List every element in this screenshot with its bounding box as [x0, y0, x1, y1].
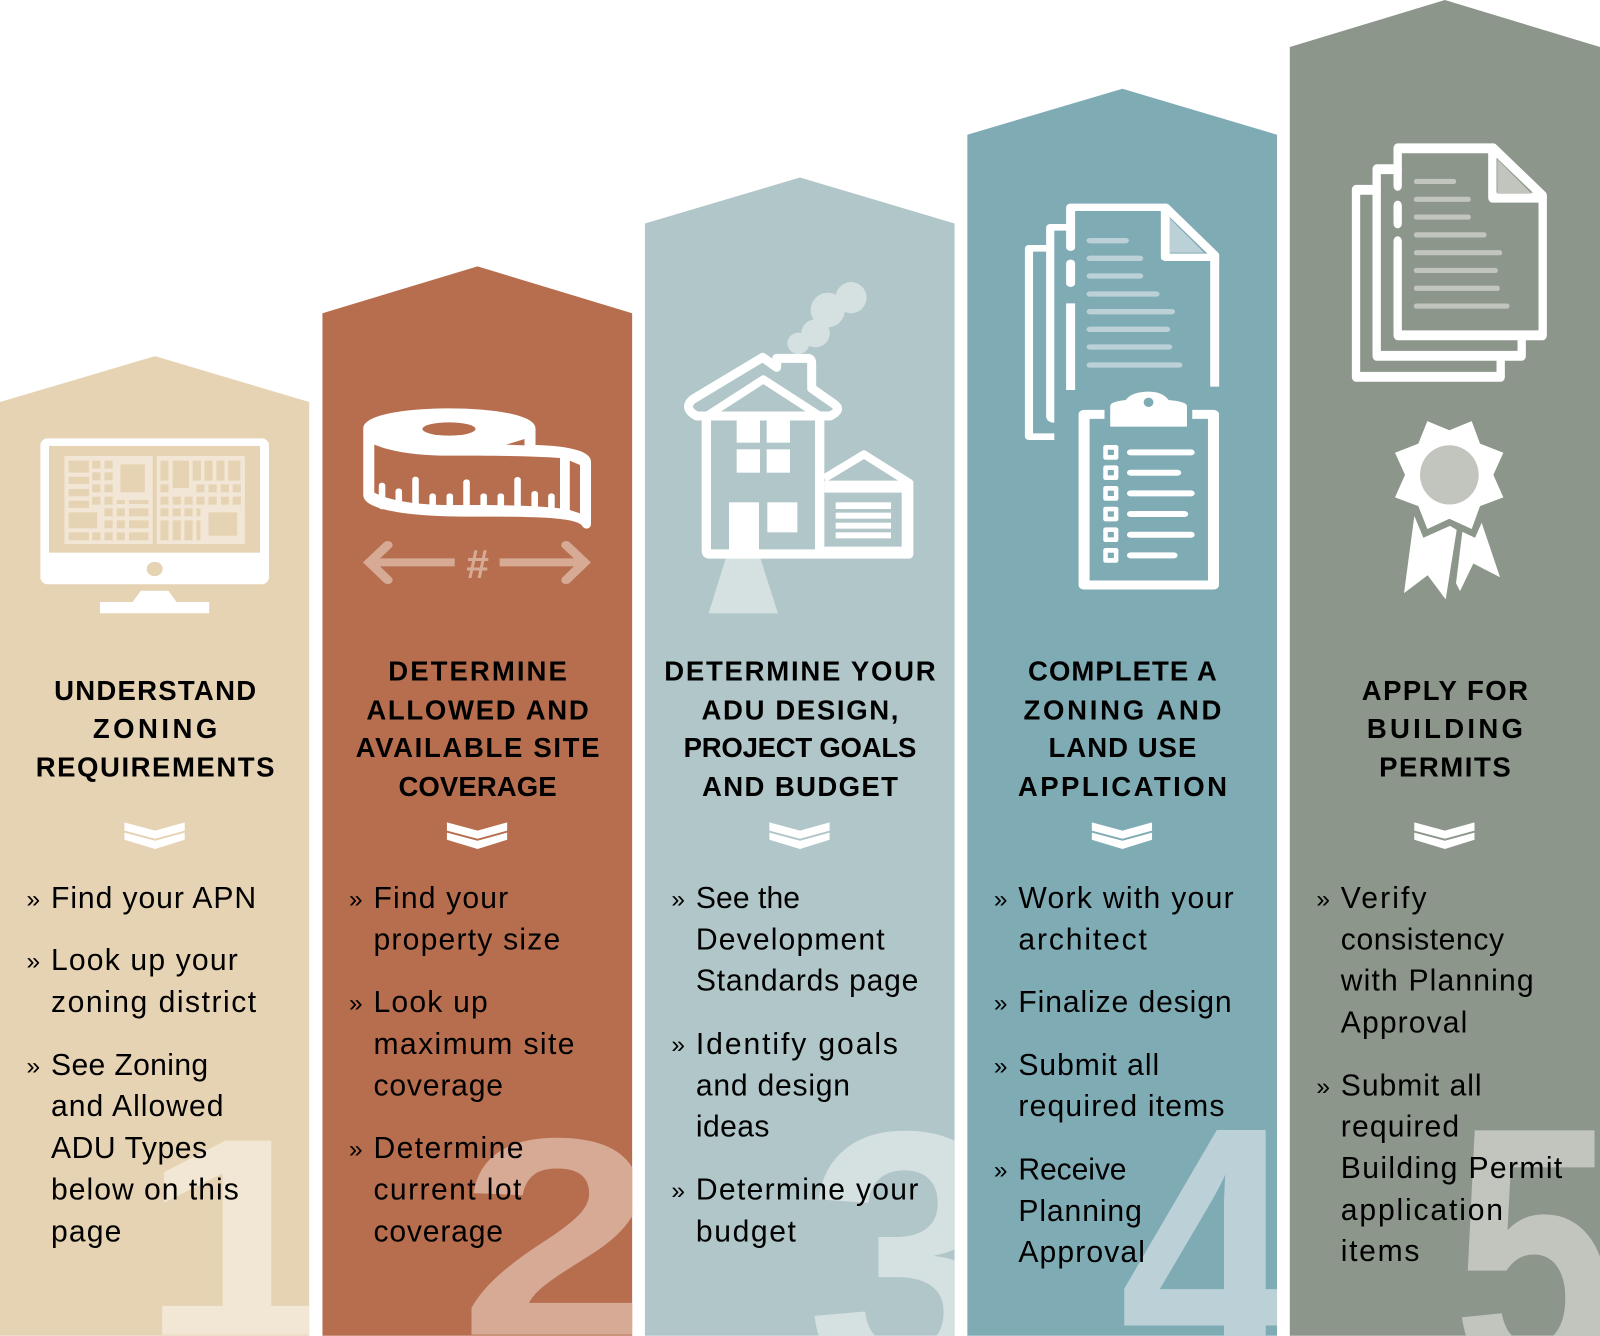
list: step 3 items: » — [671, 886, 685, 913]
list: step 4 items: » — [994, 886, 1007, 913]
list: step 3 items: Determine your — [696, 1174, 918, 1207]
list: step 5 items: Verify — [1341, 882, 1427, 915]
list: step 1 items: page — [51, 1216, 121, 1249]
list: step 5 items: Submit all — [1341, 1070, 1482, 1103]
heading: step 2: AVAILABLE SITE — [356, 732, 599, 763]
heading: step 3: AND BUDGET — [702, 771, 898, 802]
list: step 4 items: Finalize design — [1018, 986, 1232, 1019]
list: step 5 items: application — [1341, 1194, 1503, 1227]
list: step 2 items: Look up — [373, 986, 488, 1019]
icon: computer monitor with parcel map — [40, 438, 269, 613]
list: step 5 items: consistency — [1341, 924, 1504, 957]
list: step 2 items: current lot — [373, 1174, 522, 1207]
list: step 1 items: ADU Types — [51, 1132, 207, 1165]
icon: double chevron — [1414, 822, 1474, 849]
heading: step 1: UNDERSTAND — [54, 675, 256, 706]
list: step 2 items: » — [349, 886, 363, 913]
list: step 4 items: » — [994, 1157, 1007, 1184]
icon: house with garage — [689, 357, 913, 559]
list: step 5 items: » — [1316, 886, 1330, 913]
icon: double chevron — [447, 822, 507, 849]
list: step 3 items: budget — [696, 1216, 797, 1249]
icon: smoke and walkway — [709, 282, 867, 613]
list: step 1 items: Find your APN — [51, 882, 256, 915]
heading: step 1: ZONING — [93, 713, 217, 744]
heading: step 1: REQUIREMENTS — [36, 752, 274, 783]
list: step 5 items: required — [1341, 1110, 1459, 1143]
list: step 3 items: Development — [696, 924, 885, 957]
list: step 1 items — [27, 882, 257, 1249]
heading: step 5: BUILDING — [1367, 713, 1523, 744]
heading: step 3: PROJECT GOALS — [684, 732, 916, 763]
list: step 2 items: Determine — [373, 1132, 523, 1165]
icon: stacked documents — [1356, 148, 1543, 377]
panel: step 3 determine ADU design — [644, 178, 955, 1336]
list: step 3 items: and design — [696, 1070, 850, 1103]
heading: step 4: COMPLETE A — [1028, 656, 1217, 687]
heading: step 2: ALLOWED AND — [366, 694, 589, 725]
heading: step 2: COVERAGE — [398, 771, 557, 802]
heading: step 3 — [664, 656, 936, 802]
list: step 2 items: coverage — [373, 1070, 503, 1103]
icon: double chevron — [769, 822, 830, 849]
icon: width arrows with number sign — [369, 541, 584, 587]
list: step 4 items — [994, 882, 1234, 1269]
list: step 4 items: » — [994, 1053, 1007, 1080]
icon: clipboard checklist — [1084, 392, 1213, 585]
list: step 2 items: » — [349, 990, 363, 1017]
panel: step 2 determine site coverage — [322, 266, 657, 1336]
heading: step 5 — [1362, 675, 1528, 783]
heading: step 1 — [36, 675, 274, 783]
list: step 4 items: architect — [1018, 924, 1148, 957]
list: step 5 items: Approval — [1341, 1006, 1467, 1039]
list: step 4 items: Approval — [1018, 1236, 1145, 1269]
heading: step 5: PERMITS — [1379, 752, 1511, 783]
list: step 1 items: and Allowed — [51, 1090, 223, 1123]
heading: step 5: APPLY FOR — [1362, 675, 1528, 706]
heading: step 3: DETERMINE YOUR — [664, 656, 936, 687]
panel: step 1 understand zoning requirements — [0, 356, 337, 1336]
list: step 5 items: » — [1316, 1074, 1330, 1101]
list: step 4 items: Submit all — [1018, 1049, 1159, 1082]
heading: step 2: DETERMINE — [388, 656, 567, 687]
list: step 5 items: Building Permit — [1341, 1152, 1563, 1185]
list: step 4 items: Receive — [1018, 1153, 1127, 1186]
list: step 3 items: Identify goals — [696, 1028, 898, 1061]
list: step 1 items: below on this — [51, 1174, 239, 1207]
list: step 1 items: zoning district — [51, 986, 257, 1019]
heading: step 4: ZONING AND — [1023, 694, 1221, 725]
heading: step 2 — [356, 656, 599, 802]
heading: step 4 — [1018, 656, 1227, 802]
list: step 1 items: » — [27, 1053, 40, 1080]
list: step 3 items: » — [671, 1178, 685, 1205]
panel: step 5 apply for building permits — [1290, 0, 1600, 1336]
list: step 5 items: with Planning — [1340, 964, 1534, 997]
list: step 2 items: » — [349, 1136, 363, 1163]
icon: measuring tape — [363, 408, 591, 529]
list: step 2 items: Find your — [373, 882, 508, 915]
list: step 3 items — [671, 882, 918, 1249]
heading: step 4: LAND USE — [1048, 732, 1196, 763]
list: step 1 items: » — [27, 886, 40, 913]
icon: award ribbon — [1395, 421, 1503, 599]
list: step 4 items: Planning — [1018, 1195, 1142, 1228]
list: step 4 items: » — [994, 990, 1007, 1017]
icon: double chevron — [124, 822, 185, 849]
list: step 2 items: coverage — [373, 1216, 503, 1249]
list: step 2 items — [349, 882, 574, 1249]
list: step 3 items: See the — [696, 882, 800, 915]
icon: width arrows with number sign: # — [466, 541, 489, 587]
heading: step 4: APPLICATION — [1018, 771, 1227, 802]
list: step 5 items — [1316, 882, 1563, 1268]
list: step 4 items: required items — [1018, 1090, 1224, 1123]
list: step 1 items: » — [27, 948, 40, 975]
heading: step 3: ADU DESIGN, — [702, 694, 898, 725]
icon: documents — [1029, 207, 1215, 437]
list: step 5 items: items — [1341, 1235, 1419, 1268]
list: step 3 items: ideas — [696, 1110, 769, 1143]
list: step 1 items: See Zoning — [51, 1049, 208, 1082]
icon: double chevron — [1092, 822, 1152, 849]
list: step 3 items: Standards page — [696, 964, 918, 997]
list: step 4 items: Work with your — [1018, 882, 1234, 915]
list: step 1 items: Look up your — [51, 944, 238, 977]
panel: step 4 zoning and land use application — [967, 89, 1299, 1336]
list: step 2 items: property size — [373, 924, 560, 957]
list: step 2 items: maximum site — [373, 1028, 574, 1061]
list: step 3 items: » — [671, 1032, 685, 1059]
